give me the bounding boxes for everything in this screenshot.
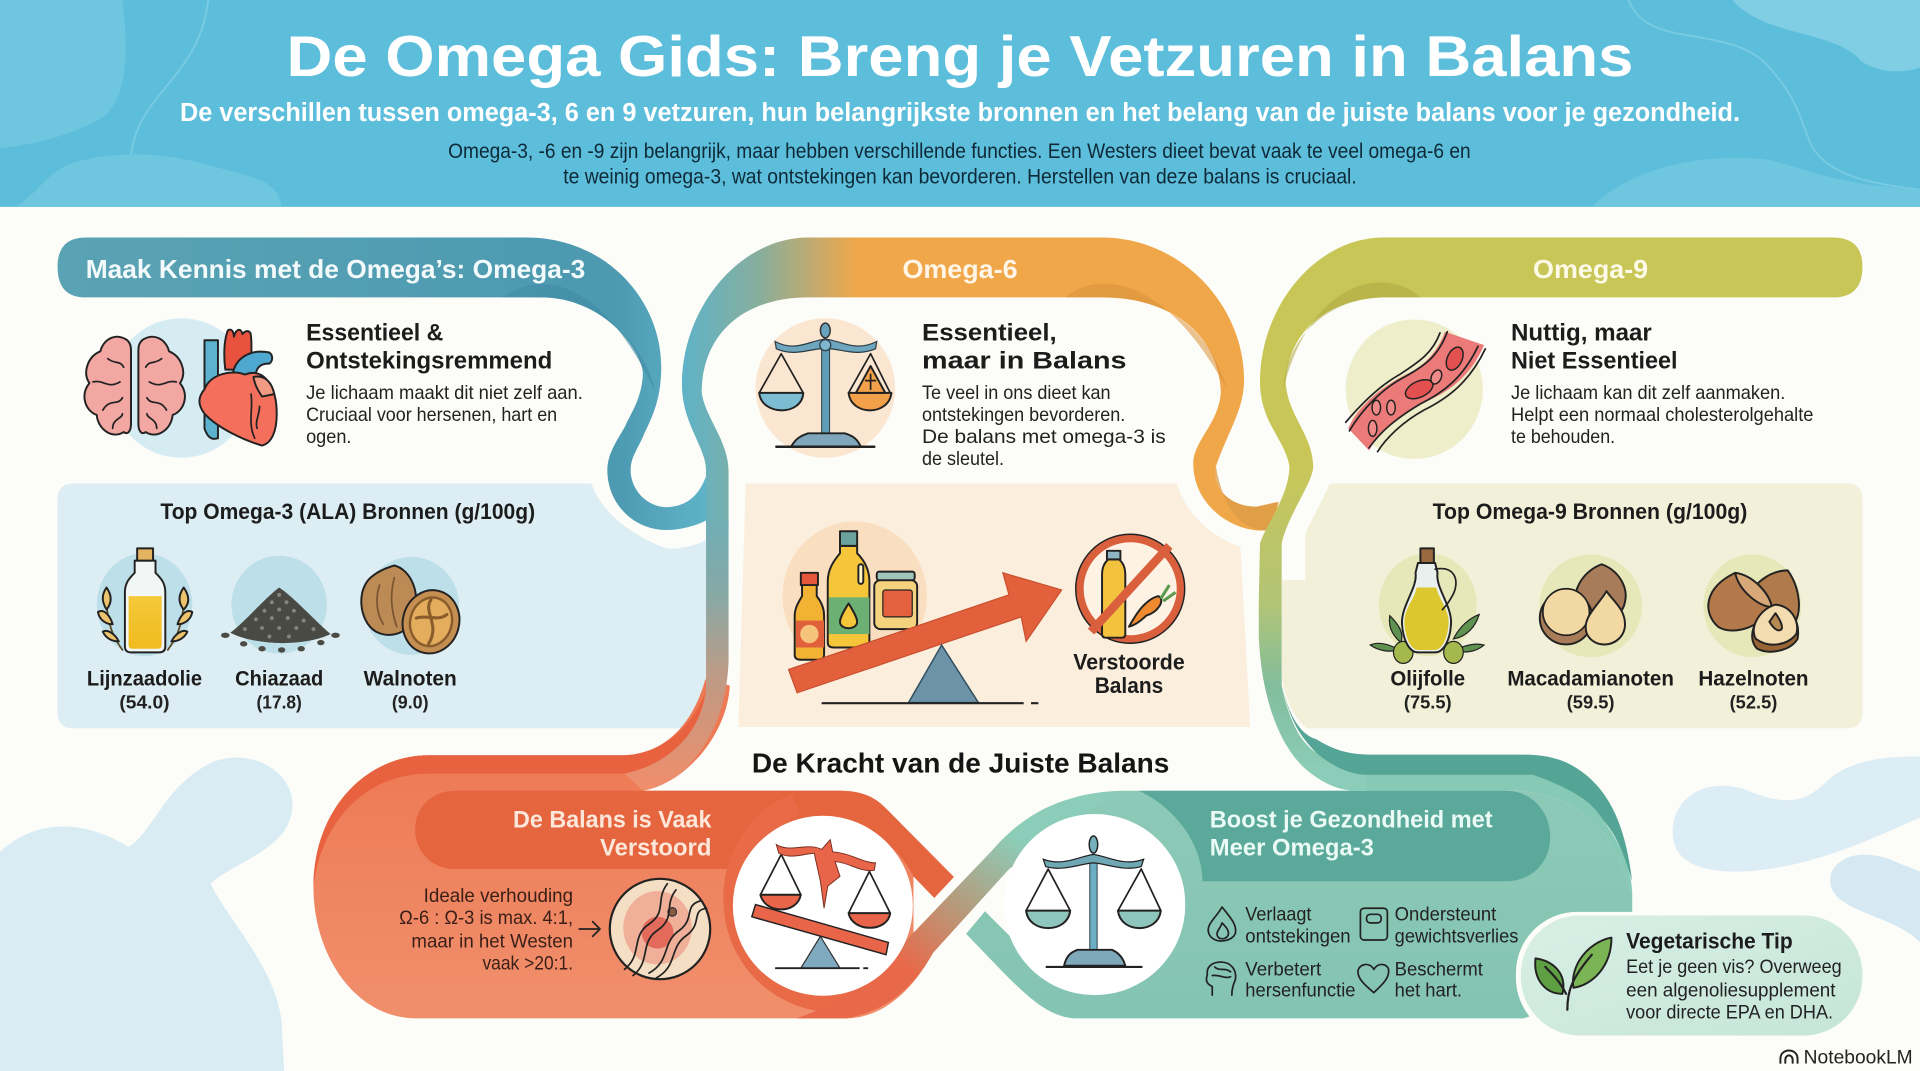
icon: brain and heart: [84, 318, 277, 458]
benefit: reduces inflammation: [1208, 904, 1351, 947]
text block: omega-6: De balans met omega-3 is: [922, 427, 1166, 448]
icon: head with brain: [1206, 962, 1236, 995]
icon: flame: [1208, 907, 1236, 941]
icon: omega-6 scale: [756, 318, 895, 458]
subtitle: De verschillen tussen omega-3, 6 en 9 vetzuren, hun belangrijkste bronnen en het belang van de juiste balans voor je gezondheid.: [180, 97, 1740, 127]
circle: broken balance: [733, 816, 913, 996]
source: macadamia nuts: [1539, 554, 1642, 657]
intro text: [448, 140, 1471, 189]
text block: omega-9: Niet Essentieel: [1511, 347, 1678, 374]
heading: balance is often disturbed: [513, 806, 712, 862]
label: walnuts: [364, 666, 457, 713]
ribbon: central column: [624, 520, 729, 791]
text block: ideal ratio: Ω-6 : Ω-3 is max. 4:1,: [399, 908, 573, 929]
label: walnuts: Walnoten: [364, 666, 457, 690]
arrow: rising omega-6: [789, 573, 1062, 693]
background blob: lower right: [1673, 756, 1920, 942]
arrow: ratio to inflammation: [579, 922, 600, 936]
text block: omega-6: Te veel in ons dieet kan: [922, 383, 1111, 404]
text block: omega-3: ogen.: [306, 427, 351, 448]
source: walnuts: [361, 557, 466, 660]
callout: vegetarian tip: Vegetarische Tip: [1626, 929, 1793, 954]
label: chia seed: Chiazaad: [235, 666, 323, 690]
label: macadamia nuts: Macadamianoten: [1507, 666, 1674, 690]
callout: vegetarian tip: een algenoliesupplement: [1626, 980, 1836, 1001]
ribbon: crossing connector: [796, 791, 1120, 1018]
icon: seesaw pivot: [909, 645, 978, 703]
label: flaxseed oil: (54.0): [119, 692, 170, 713]
benefit: supports weight loss: [1360, 904, 1518, 947]
text block: omega-3: Ontstekingsremmend: [306, 347, 552, 374]
label: olive oil: [1390, 666, 1465, 713]
icon: large oil bottle: [828, 531, 869, 647]
text block: omega-9: Nuttig, maar: [1511, 319, 1652, 346]
text block: omega-3: Cruciaal voor hersenen, hart en: [306, 405, 557, 426]
benefit: protects the heart: Beschermt: [1395, 960, 1484, 981]
heading: boost your health: Meer Omega-3: [1210, 835, 1374, 862]
intro text: te weinig omega-3, wat ontstekingen kan bevorderen. Herstellen van deze balans is cruciaal.: [563, 166, 1357, 189]
intro text: Omega-3, -6 en -9 zijn belangrijk, maar hebben verschillende functies. Een Westers dieet bevat vaak te veel omega-6 en: [448, 140, 1471, 163]
label: hazelnuts: Hazelnoten: [1698, 666, 1809, 690]
heading: boost your health: [1210, 806, 1493, 862]
panel: omega-3 sources background: [58, 483, 707, 728]
text block: ideal ratio: [399, 886, 573, 974]
text block: omega-6: [922, 319, 1166, 470]
heading: balance is often disturbed: De Balans is Vaak: [513, 806, 712, 833]
source: flaxseed oil: [97, 548, 192, 656]
callout: vegetarian tip: voor directe EPA en DHA.: [1626, 1002, 1833, 1023]
text block: ideal ratio: Ideale verhouding: [424, 886, 573, 907]
icon: heart: [199, 330, 277, 446]
text block: omega-6: ontstekingen bevorderen.: [922, 405, 1125, 426]
label: disturbed balance: Balans: [1095, 673, 1163, 698]
icon: weighing scale: [1360, 908, 1387, 940]
text block: omega-3: Essentieel &: [306, 319, 443, 346]
icon: jar: [874, 572, 917, 629]
text block: omega-9: Helpt een normaal cholesterolgehalte: [1511, 405, 1813, 426]
benefit: supports weight loss: gewichtsverlies: [1395, 926, 1518, 947]
icon: prohibition sign: [1076, 534, 1185, 643]
benefit: improves brain function: [1206, 960, 1356, 1001]
logo: NotebookLM: NotebookLM: [1804, 1048, 1913, 1069]
callout: vegetarian tip: [1516, 912, 1865, 1039]
icon: sprout: [1535, 938, 1611, 1010]
label: chia seed: (17.8): [257, 692, 302, 713]
title: De Omega Gids: Breng je Vetzuren in Balans: [287, 25, 1633, 89]
icon: inflamed tissue: [610, 879, 710, 979]
label: macadamia nuts: (59.5): [1567, 692, 1614, 713]
benefit: reduces inflammation: ontstekingen: [1245, 926, 1351, 947]
label: macadamia nuts: [1507, 666, 1674, 713]
benefit: protects the heart: het hart.: [1395, 980, 1462, 1001]
icon: blood vessel: [1346, 319, 1485, 459]
text block: omega-9: te behouden.: [1511, 427, 1615, 448]
callout: vegetarian tip: Eet je geen vis? Overweeg: [1626, 957, 1842, 978]
heading: balance is often disturbed: Verstoord: [600, 835, 711, 862]
heading: power of the right balance: De Kracht van de Juiste Balans: [752, 747, 1169, 778]
label: chia seed: [235, 666, 323, 713]
circle: restored balance: [1004, 814, 1185, 995]
illustration: omega-6 rich foods on tilted arrow: [782, 521, 1062, 703]
header banner: [0, 0, 1920, 207]
icon: heart outline: [1358, 964, 1389, 993]
benefit: improves brain function: hersenfunctie: [1245, 980, 1356, 1001]
ribbon: omega-9: [1259, 237, 1862, 791]
source: chia seed: [221, 556, 340, 654]
text block: omega-6: de sleutel.: [922, 449, 1004, 470]
label: disturbed balance: [1073, 650, 1185, 698]
heading: omega-3: Maak Kennis met de Omega’s: Omega-3: [86, 256, 585, 284]
ribbon: omega-6: [682, 237, 1278, 530]
panel: omega-6 imbalance background: [738, 483, 1250, 727]
label: hazelnuts: [1698, 666, 1809, 713]
panel: omega-9 sources background: [1282, 483, 1862, 728]
text block: ideal ratio: maar in het Westen: [411, 931, 573, 952]
text block: omega-3: Je lichaam maakt dit niet zelf aan.: [306, 383, 583, 404]
benefit: improves brain function: Verbetert: [1245, 960, 1322, 981]
text block: ideal ratio: vaak >20:1.: [482, 953, 573, 974]
label: disturbed balance: Verstoorde: [1073, 650, 1185, 675]
heading: omega-9: Omega-9: [1533, 256, 1648, 284]
label: hazelnuts: (52.5): [1730, 692, 1777, 713]
text block: omega-6: Essentieel,: [922, 319, 1057, 346]
benefit: reduces inflammation: Verlaagt: [1245, 904, 1312, 925]
text block: omega-9: [1511, 319, 1813, 448]
heading: boost your health: Boost je Gezondheid met: [1210, 806, 1493, 833]
label: flaxseed oil: Lijnzaadolie: [87, 666, 202, 690]
label: flaxseed oil: [87, 666, 202, 713]
background blob: lower left: [0, 758, 293, 1071]
icon: brain: [84, 337, 185, 435]
heading: omega-6: Omega-6: [902, 256, 1018, 284]
text block: omega-9: Je lichaam kan dit zelf aanmaken.: [1511, 383, 1785, 404]
ribbon: omega-3: [58, 237, 709, 530]
text block: omega-6: maar in Balans: [922, 347, 1127, 374]
ribbon: teal lower band with balance: [966, 683, 1632, 1018]
label: olive oil: Olijfolle: [1390, 666, 1465, 690]
ribbon: red lower band with disturbed balance: [313, 679, 954, 1018]
heading: omega-3 sources: Top Omega-3 (ALA) Bronnen (g/100g): [160, 499, 535, 524]
heading: omega-9 sources: Top Omega-9 Bronnen (g/100g): [1433, 499, 1747, 524]
text block: omega-3: [306, 319, 583, 448]
label: olive oil: (75.5): [1404, 692, 1452, 713]
benefit: supports weight loss: Ondersteunt: [1395, 904, 1497, 925]
source: olive oil: [1370, 548, 1484, 663]
label: walnuts: (9.0): [392, 692, 429, 713]
icon: small bottle: [795, 573, 824, 660]
benefit: protects the heart: [1358, 960, 1484, 1001]
source: hazelnuts: [1703, 554, 1801, 657]
